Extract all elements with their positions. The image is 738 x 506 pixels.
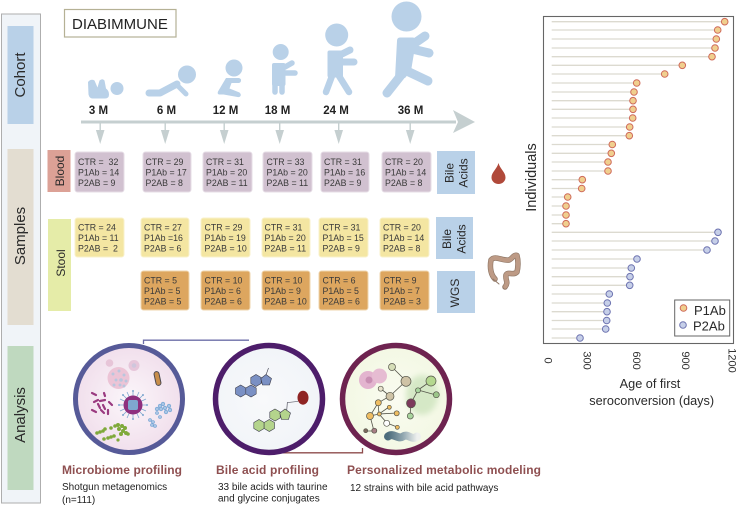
molecule: green conjugated steroid (254, 402, 298, 432)
row: blood sample counts: P2AB = 9 (324, 178, 362, 188)
row: stool bile acid sample counts: P2AB = 2 (78, 244, 118, 254)
panel: left stage sidebar (2, 14, 40, 503)
row: stool WGS sample counts: P1Ab = 9 (264, 286, 301, 296)
assay label: blood bile acids: Acids (456, 158, 470, 188)
P1Ab points (563, 18, 728, 227)
stage: Analysis: Analysis (12, 387, 29, 443)
row: blood sample counts: CTR = 20 (385, 157, 423, 167)
row: stool bile acid sample counts: CTR = 27 (144, 222, 182, 232)
x axis tick labels: 0 (542, 357, 554, 364)
row: stool WGS sample counts: P2AB = 3 (384, 296, 421, 306)
row: stool WGS sample counts: P2AB = 5 (144, 296, 182, 306)
x axis tick labels (542, 348, 738, 373)
assay label: WGS (437, 271, 475, 313)
assay label: stool bile acids: Acids (454, 224, 468, 254)
network nodes (364, 364, 439, 433)
icon: child 36 months (387, 2, 429, 93)
x axis title: seroconversion (days) (589, 394, 714, 408)
row: stool WGS sample counts: CTR = 10 (204, 276, 242, 286)
row: stool WGS sample counts: P1Ab = 5 (144, 286, 181, 296)
text: microbiome profiling (62, 463, 182, 506)
row: blood sample counts: P1Ab = 20 (266, 168, 308, 178)
row: blood sample counts: P2AB = 11 (206, 178, 248, 188)
timeline arrow (81, 110, 475, 133)
row: blood sample counts: CTR = 29 (146, 157, 183, 167)
molecule: blue steroid (236, 368, 272, 397)
x axis tick labels: 600 (630, 351, 642, 370)
icon: baby 12 months (218, 60, 242, 97)
blue cocci (148, 402, 172, 428)
P2Ab points (577, 229, 721, 341)
pink vesicles (106, 359, 140, 389)
row: stool bile acid sample counts: CTR = 29 (204, 222, 242, 232)
timepoint labels: 3 M (89, 105, 108, 117)
assay label: blood bile acids: Bile (442, 163, 456, 183)
title: DIABIMMUNE (64, 10, 176, 37)
timepoint labels: 18 M (265, 105, 290, 117)
title: DIABIMMUNE: DIABIMMUNE (72, 16, 168, 33)
connector: microbiome to bile acid (144, 340, 249, 344)
text: bile acid profiling: 33 bile acids with taurine (218, 482, 328, 493)
timepoint labels (89, 105, 423, 117)
x axis title (589, 377, 714, 408)
row: stool bile acid sample counts: CTR = 31 (264, 222, 302, 232)
purple rods (92, 393, 112, 414)
text: bile acid profiling: and glycine conjugates (218, 494, 320, 504)
icon: toddler 18 months (272, 44, 295, 92)
icon: blood drop (492, 163, 506, 184)
sample type: Stool (48, 219, 71, 311)
icons: growing child silhouettes (88, 2, 429, 98)
legend: P2Ab (693, 318, 725, 334)
legend (675, 300, 730, 336)
pink blobs (359, 368, 387, 389)
timepoint labels: 36 M (398, 105, 423, 117)
panel: metabolic modeling circle (342, 346, 450, 452)
x axis title: Age of first (620, 377, 681, 391)
row: blood sample counts: P1Ab = 14 (385, 168, 426, 178)
assay label: blood bile acids (437, 151, 475, 194)
stage: Cohort: Cohort (12, 52, 29, 98)
row: blood sample counts (75, 152, 431, 192)
row: stool WGS sample counts: P2AB = 6 (322, 296, 360, 306)
text: microbiome profiling: Shotgun metagenomics (62, 482, 167, 493)
down arrows from timeline (96, 122, 414, 144)
row: stool WGS sample counts: CTR = 9 (384, 276, 417, 286)
row: stool bile acid sample counts: P1Ab = 20 (264, 233, 306, 243)
row: blood sample counts: CTR = 31 (324, 157, 362, 167)
text: personalized metabolic modeling: 12 strains with bile acid pathways (350, 483, 498, 494)
gene strand (388, 435, 417, 438)
icon: baby 6 months (149, 66, 196, 94)
sample type: Blood (48, 150, 70, 192)
row: blood sample counts: P1Ab = 16 (324, 168, 365, 178)
row: blood sample counts: P1Ab = 17 (146, 168, 187, 178)
panel: bile acid circle (216, 346, 322, 452)
text: bile acid profiling (216, 463, 328, 504)
row: stool bile acid sample counts: CTR = 24 (78, 222, 116, 232)
row: blood sample counts: CTR = 33 (266, 157, 304, 167)
row: stool WGS sample counts: P2AB = 6 (204, 296, 242, 306)
row: stool bile acid sample counts: CTR = 20 (383, 222, 421, 232)
row: stool bile acid sample counts: P2AB = 8 (383, 244, 421, 254)
row: stool bile acid sample counts: P2AB = 6 (144, 244, 182, 254)
sample type: Blood: Blood (53, 156, 67, 186)
row: stool bile acid sample counts: P2AB = 9 (322, 244, 360, 254)
network edges (366, 367, 436, 431)
row: blood sample counts: P2AB = 11 (266, 178, 308, 188)
lollipop stems (552, 22, 725, 338)
row: stool bile acid sample counts: CTR = 31 (322, 222, 360, 232)
icon: colon (490, 255, 518, 287)
virus (118, 390, 148, 420)
row: stool bile acid sample counts (75, 218, 429, 257)
timepoint labels: 6 M (157, 105, 176, 117)
conjugate (298, 391, 308, 405)
x axis tick labels: 900 (679, 351, 691, 370)
row: stool WGS sample counts: P1Ab = 6 (204, 286, 241, 296)
assay label: stool bile acids: Bile (440, 229, 454, 249)
row: stool WGS sample counts: CTR = 10 (264, 276, 302, 286)
legend: P1Ab (694, 303, 726, 318)
soft green glow (406, 375, 438, 415)
x axis tick labels: 1200 (726, 348, 738, 373)
text: bile acid profiling: Bile acid profiling (216, 463, 319, 477)
text: personalized metabolic modeling (347, 463, 541, 494)
row: blood sample counts: P2AB = 9 (78, 178, 116, 188)
row: blood sample counts: P2AB = 8 (385, 178, 423, 188)
text: microbiome profiling: Microbiome profiling (62, 463, 182, 477)
icon: baby 3 months (88, 79, 124, 98)
sample type: Stool: Stool (54, 249, 68, 277)
row: stool bile acid sample counts: P1Ab = 14 (383, 233, 424, 243)
row: blood sample counts: P2AB = 8 (146, 178, 183, 188)
row: stool WGS sample counts: P1Ab = 7 (384, 286, 420, 296)
row: stool WGS sample counts (141, 271, 429, 310)
row: stool WGS sample counts: P2AB = 10 (264, 296, 307, 306)
timepoint labels: 24 M (323, 105, 349, 117)
assay label: WGS: WGS (448, 279, 462, 307)
green cocci (95, 423, 130, 442)
text: microbiome profiling: (n=111) (62, 495, 95, 506)
stage: Analysis (8, 346, 34, 490)
y axis title: Individuals (524, 143, 540, 212)
row: stool WGS sample counts: CTR = 6 (322, 276, 356, 286)
row: stool bile acid sample counts: P1Ab = 19 (204, 233, 246, 243)
row: blood sample counts: P1Ab = 14 (78, 168, 119, 178)
row: stool bile acid sample counts: P2AB = 10 (204, 244, 247, 254)
stage: Samples (8, 149, 34, 325)
row: stool WGS sample counts: CTR = 5 (144, 276, 177, 286)
row: blood sample counts: CTR = 32 (78, 157, 118, 167)
row: stool bile acid sample counts: P1Ab = 15 (322, 233, 364, 243)
row: stool bile acid sample counts: P1Ab =16 (144, 233, 183, 243)
x axis tick labels: 300 (580, 351, 592, 370)
row: stool bile acid sample counts: P1Ab = 11 (78, 233, 119, 243)
panel: microbiome circle (76, 346, 182, 452)
row: blood sample counts: P1Ab = 20 (206, 168, 247, 178)
chart: age of first seroconversion (524, 16, 738, 408)
row: stool WGS sample counts: P1Ab = 5 (322, 286, 359, 296)
icon: toddler 24 months (325, 24, 354, 92)
text: personalized metabolic modeling: Personalized metabolic modeling (347, 463, 541, 477)
timepoint labels: 12 M (213, 105, 238, 117)
row: stool bile acid sample counts: P2AB = 11 (264, 244, 306, 254)
stage: Samples: Samples (12, 207, 29, 265)
assay label: stool bile acids (436, 217, 473, 259)
stage: Cohort (8, 26, 34, 124)
bacillus (154, 371, 161, 386)
row: blood sample counts: CTR = 31 (206, 157, 244, 167)
connector: bile acid to modeling (268, 448, 362, 453)
